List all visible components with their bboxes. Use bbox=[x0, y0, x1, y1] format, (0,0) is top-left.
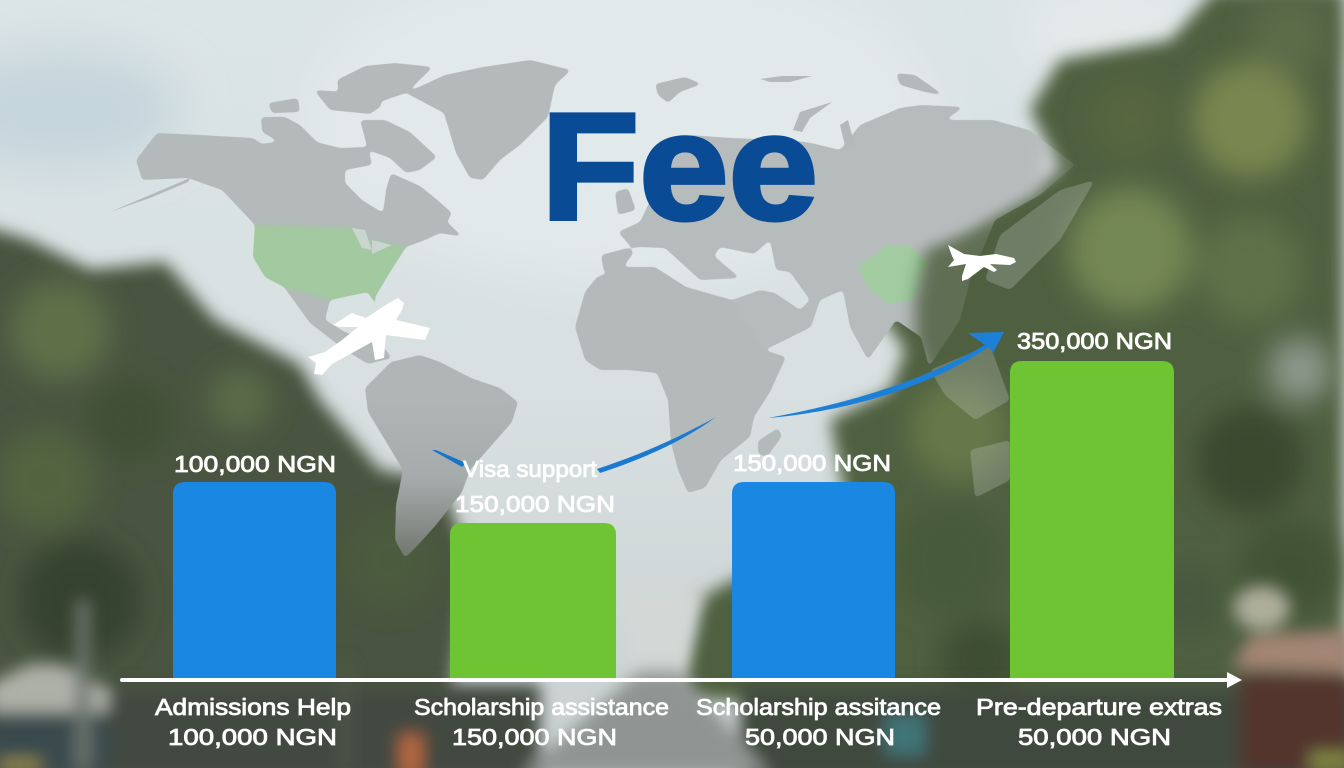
bar: Pre-departure extras bbox=[1010, 361, 1174, 679]
arrow: rising curve across the chart bbox=[432, 332, 1004, 473]
map: Alaska tail bbox=[110, 178, 190, 212]
category label: Scholarship assitance: 50,000 NGN bbox=[745, 724, 895, 750]
category label: Pre-departure extras bbox=[976, 694, 1222, 750]
icon: small airplane bbox=[948, 245, 1016, 281]
map: USA highlighted bbox=[253, 225, 406, 310]
world map bbox=[110, 60, 1075, 558]
axis arrow bbox=[120, 672, 1242, 688]
map: Great Lakes bbox=[352, 228, 392, 254]
street details bbox=[400, 735, 422, 768]
street band bbox=[0, 684, 540, 768]
category label: Scholarship assitance: Scholarship assitance bbox=[696, 694, 941, 720]
bar value labels: Visa support bbox=[463, 456, 598, 482]
bar: Scholarship assistance bbox=[450, 523, 616, 679]
left tree mass bbox=[0, 225, 470, 700]
bar value labels: 100,000 NGN bbox=[174, 451, 336, 477]
right tree mass bbox=[680, 0, 1344, 700]
category label: Pre-departure extras: 50,000 NGN bbox=[1018, 724, 1171, 750]
category label: Scholarship assistance bbox=[414, 694, 669, 750]
distant gap bbox=[618, 590, 705, 690]
category label: Admissions Help: 100,000 NGN bbox=[168, 724, 337, 750]
bar: Admissions Help bbox=[173, 482, 336, 679]
map: Iberia bbox=[601, 248, 634, 272]
bar: Scholarship assitance bbox=[732, 482, 895, 679]
map: Greenland bbox=[406, 60, 571, 180]
bar value labels: 350,000 NGN bbox=[1017, 328, 1172, 354]
category label: Admissions Help: Admissions Help bbox=[155, 694, 351, 720]
map: Siberian islands bbox=[656, 77, 698, 102]
category label: Pre-departure extras: Pre-departure extras bbox=[976, 694, 1222, 720]
map: Africa bbox=[575, 267, 786, 493]
bar value labels: 150,000 NGN bbox=[455, 491, 615, 517]
map: small islands bbox=[760, 76, 852, 144]
category label: Scholarship assistance: Scholarship assistance bbox=[414, 694, 669, 720]
map: Britain bbox=[616, 189, 635, 214]
title: Fee bbox=[541, 82, 818, 252]
map: Pacific Asia over trees bbox=[930, 180, 1095, 498]
category label: Scholarship assistance: 150,000 NGN bbox=[452, 724, 617, 750]
map: Arctic islands bbox=[335, 63, 430, 107]
map: China highlighted bbox=[857, 245, 929, 304]
map: North America bbox=[136, 133, 463, 364]
left building bbox=[0, 664, 108, 712]
bar value labels bbox=[174, 328, 1172, 517]
map: Madagascar bbox=[758, 430, 782, 456]
category label: Admissions Help bbox=[155, 694, 351, 750]
map: Eurasia bbox=[618, 105, 1075, 367]
right building bbox=[1232, 630, 1344, 672]
map: South America bbox=[365, 355, 518, 558]
bar value labels: 150,000 NGN bbox=[733, 450, 891, 476]
icon: large airplane bbox=[308, 298, 430, 375]
category label: Scholarship assitance bbox=[696, 694, 941, 750]
